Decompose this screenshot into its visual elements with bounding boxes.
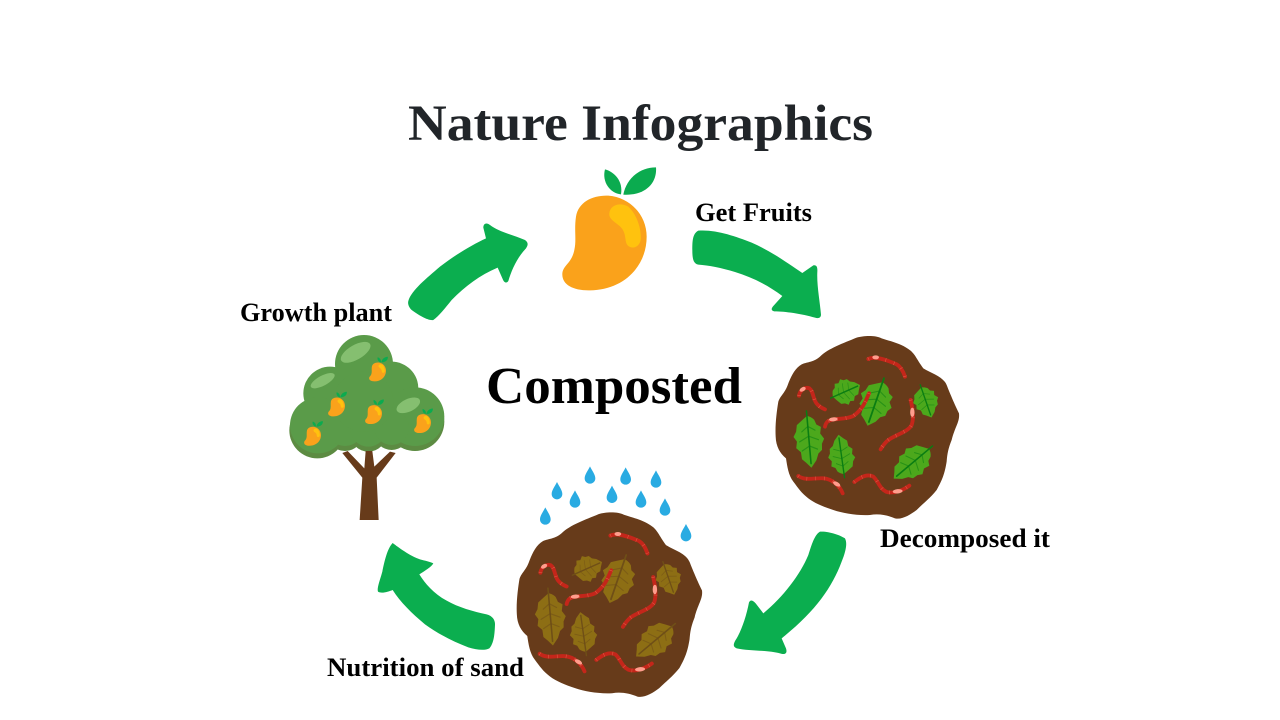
icon: mango tree	[289, 335, 444, 520]
tree trunk	[342, 451, 396, 520]
center heading: Composted: Composted	[486, 358, 742, 415]
tree canopy shadow	[289, 392, 444, 458]
arrow: fruit to decomposed soil	[692, 230, 821, 318]
label: Decomposed it: Decomposed it	[880, 524, 1050, 553]
icon: mango fruit	[562, 167, 656, 290]
small mangoes	[304, 357, 433, 446]
label: Growth plant: Growth plant	[240, 298, 392, 327]
icon: rain drops	[540, 466, 691, 541]
title: Nature Infographics	[408, 96, 873, 152]
arrow: growth plant to mango	[408, 224, 528, 320]
tree canopy	[290, 335, 444, 453]
canopy highlights	[309, 338, 422, 416]
icon: soil with dried brown leaves and worms	[517, 512, 702, 697]
arrow: nutrition to growth plant	[378, 543, 495, 650]
arrow: decomposed soil to nutrition	[734, 532, 846, 654]
label: Nutrition of sand: Nutrition of sand	[327, 653, 525, 682]
icon: soil with green leaves and worms	[776, 336, 959, 519]
label: Get Fruits: Get Fruits	[695, 198, 812, 227]
